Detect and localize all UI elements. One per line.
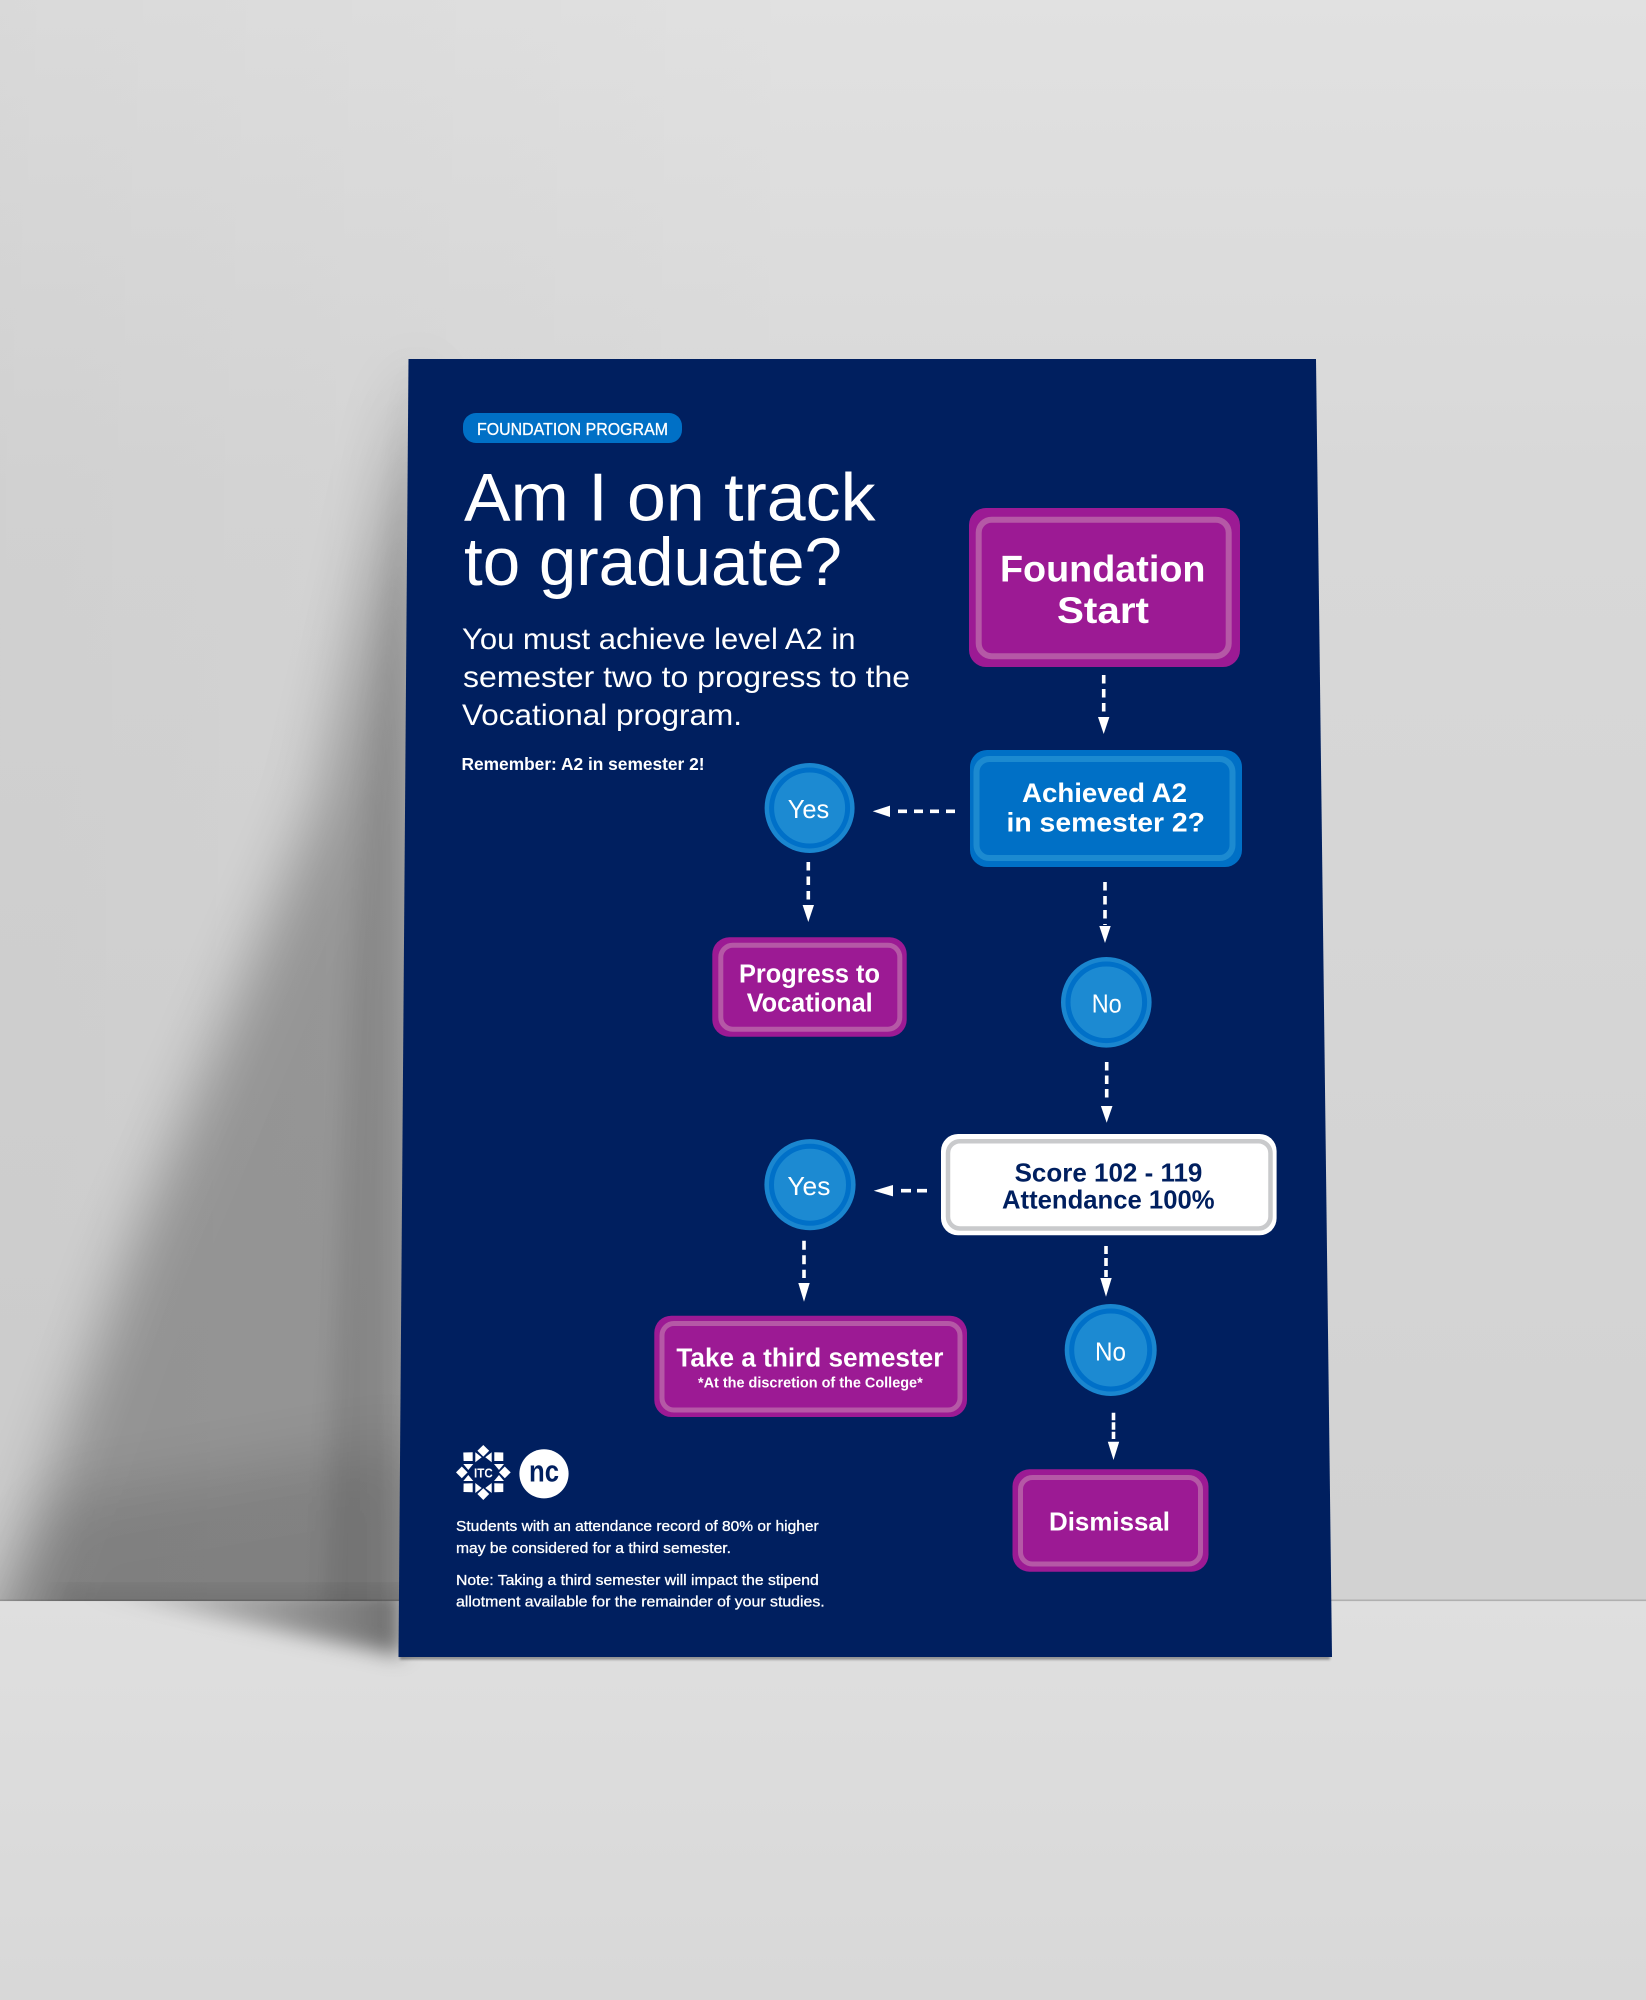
title bbox=[464, 460, 877, 600]
arrow: score to no bbox=[1100, 1246, 1112, 1297]
intro paragraph bbox=[462, 623, 910, 732]
box: dismissal bbox=[1012, 1469, 1208, 1572]
box: score and attendance decision: Score 102 - 119 bbox=[1015, 1158, 1202, 1188]
reminder text: Remember: A2 in semester 2! bbox=[462, 754, 704, 774]
arrow: achieved to yes bbox=[873, 806, 955, 817]
floor line bbox=[0, 1600, 1646, 1601]
title: to graduate? bbox=[464, 524, 842, 600]
box: progress to vocational: Progress to bbox=[739, 960, 880, 988]
tag: foundation program bbox=[463, 413, 682, 443]
circle: yes (first): Yes bbox=[788, 794, 829, 824]
footnote: attendance: may be considered for a third semester. bbox=[456, 1540, 731, 1557]
arrow: no to score bbox=[1101, 1062, 1112, 1123]
poster cast shadow on wall bbox=[0, 387, 408, 1601]
logo: nc: nc bbox=[529, 1454, 559, 1489]
circle: yes (second): Yes bbox=[787, 1171, 830, 1201]
box: foundation start bbox=[969, 508, 1240, 667]
box: achieved A2 decision: in semester 2? bbox=[1006, 808, 1205, 838]
tag: foundation program: FOUNDATION PROGRAM bbox=[477, 419, 668, 439]
arrow: score to yes bbox=[874, 1185, 927, 1196]
footnote: stipend bbox=[456, 1572, 825, 1611]
box: score and attendance decision: Attendance 100% bbox=[1002, 1184, 1215, 1214]
box: take a third semester: Take a third semester bbox=[676, 1345, 943, 1373]
logo: nc bbox=[519, 1449, 569, 1498]
box: foundation start: Foundation bbox=[1000, 548, 1206, 590]
logo: ITC: ITC bbox=[474, 1466, 493, 1480]
box: take a third semester: *At the discretion of the College* bbox=[698, 1374, 923, 1391]
poster cast shadow on floor bbox=[132, 1601, 408, 1666]
arrow: foundation start to achieved bbox=[1098, 675, 1109, 734]
intro paragraph: semester two to progress to the bbox=[463, 661, 910, 694]
circle: no (first) bbox=[1061, 957, 1152, 1048]
footnote: stipend: Note: Taking a third semester will impact the stipend bbox=[456, 1572, 819, 1589]
poster contact shadow bbox=[400, 1656, 1330, 1660]
circle: no (second): No bbox=[1095, 1337, 1126, 1367]
box: dismissal: Dismissal bbox=[1049, 1507, 1170, 1537]
intro paragraph: You must achieve level A2 in bbox=[462, 623, 856, 656]
circle: yes (first) bbox=[765, 763, 855, 853]
box: achieved A2 decision bbox=[970, 750, 1242, 867]
box: foundation start: Start bbox=[1057, 590, 1149, 631]
box: progress to vocational bbox=[712, 937, 907, 1037]
poster panel bbox=[398, 359, 1332, 1657]
arrow: no to dismissal bbox=[1108, 1413, 1119, 1460]
box: take a third semester bbox=[654, 1316, 967, 1417]
footnote: attendance bbox=[456, 1518, 819, 1557]
circle: no (second) bbox=[1065, 1304, 1157, 1396]
arrow: yes to progress bbox=[803, 862, 814, 922]
logo: ITC bbox=[456, 1445, 511, 1500]
title: Am I on track bbox=[464, 460, 877, 536]
arrow: achieved to no bbox=[1099, 882, 1111, 943]
arrow: yes to third semester bbox=[798, 1241, 810, 1302]
footnote: attendance: Students with an attendance record of 80% or higher bbox=[456, 1518, 819, 1535]
box: progress to vocational: Vocational bbox=[747, 990, 873, 1018]
background: floor bbox=[0, 1601, 1646, 2000]
circle: no (first): No bbox=[1092, 988, 1122, 1018]
box: score and attendance decision bbox=[941, 1134, 1277, 1235]
box: achieved A2 decision: Achieved A2 bbox=[1022, 778, 1187, 808]
intro paragraph: Vocational program. bbox=[462, 699, 742, 732]
circle: yes (second) bbox=[764, 1139, 856, 1230]
footnote: stipend: allotment available for the remainder of your studies. bbox=[456, 1594, 825, 1611]
